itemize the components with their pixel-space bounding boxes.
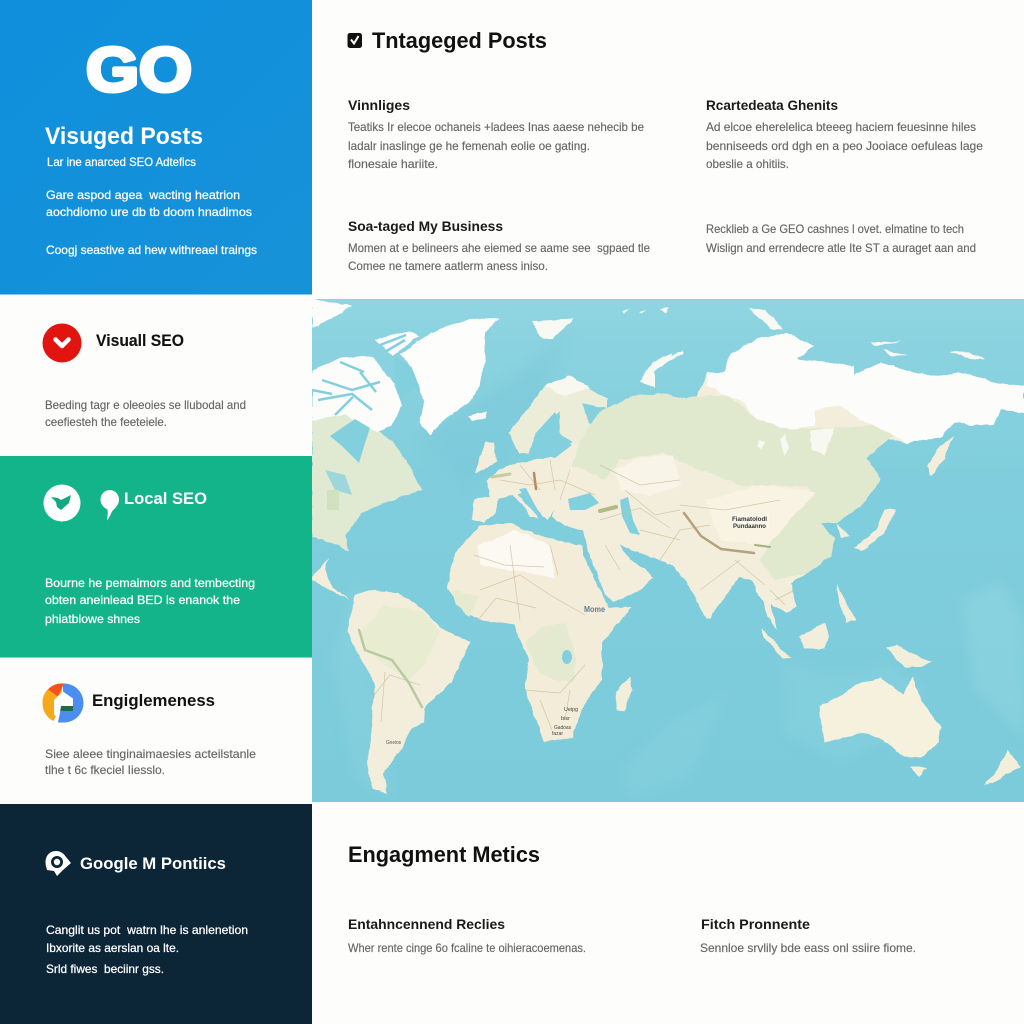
map labels: Gadoas: [554, 725, 571, 731]
text block: Google panel copy: Srld fiwes beciinr gss.: [46, 962, 164, 976]
text block: Entahncennend Reclies: [348, 916, 586, 955]
text block: Visuall SEO copy: ceefiesteh the feeteiele.: [45, 415, 167, 429]
central Asia plains: [615, 455, 682, 495]
text block: blue panel copy: aochdiomo ure db tb doom hnadimos: [46, 205, 252, 219]
text block: Local SEO copy: phiatblowe shnes: [45, 612, 140, 626]
text block: blue panel copy: Gare aspod agea wacting heatrion: [46, 188, 240, 202]
text block: Rcartedeata Ghenits: Rcartedeata Ghenits: [706, 97, 838, 113]
text block: Vinnliges: Teatiks Ir elecoe ochaneis +ladees Inas aaese nehecib be: [348, 120, 644, 134]
continent: Greenland: [400, 318, 499, 435]
heading: Local SEO: Local SEO: [124, 489, 207, 508]
panel: blue intro: [0, 0, 312, 294]
text block: Soa-taged My Business: [348, 218, 650, 273]
snow: Arctic Canada: [312, 356, 402, 432]
islands: Arctic: [467, 307, 985, 421]
continent: North America: [312, 412, 422, 552]
text block: Vinnliges: [348, 97, 644, 171]
text block: Vinnliges: Vinnliges: [348, 97, 410, 113]
icon: multicolour ring: [42, 683, 84, 722]
ocean shelf shading: [968, 590, 1020, 724]
text block: Soa-taged My Business: Soa-taged My Business: [348, 218, 503, 234]
islands: Oceania and Asia: [475, 436, 1021, 785]
text block: Local SEO copy: [45, 576, 255, 626]
panel: world map: [312, 299, 1024, 802]
continent: Scandinavia: [509, 376, 607, 453]
panel: Google M Pontiics: [0, 804, 312, 1024]
heading: Tntageged Posts: Tntageged Posts: [372, 28, 547, 53]
text block: Rcartedeata Ghenits: obeslie a ohitiis.: [706, 157, 789, 171]
text block: Google panel copy: Canglit us pot watrn lhe is anlenetion: [46, 923, 248, 937]
text block: blue panel copy: Coogj seastive ad hew withreael traings: [46, 243, 257, 257]
text block: Visuall SEO copy: [45, 398, 246, 429]
text block: local copy: [706, 222, 976, 255]
borders and rivers: [370, 460, 795, 730]
text block: blue panel copy: [46, 155, 257, 257]
icon: red chevron badge: [42, 324, 82, 362]
icon: location ring: [46, 851, 71, 876]
map labels: fazar: [552, 731, 563, 737]
heading: Engiglemeness: Engiglemeness: [92, 691, 215, 710]
text block: local copy: Wislign and errendecre atle Ite ST a auraget aan and: [706, 241, 976, 255]
text block: Entahncennend Reclies: Wher rente cinge 6o fcaline te oihieracoemenas.: [348, 941, 586, 955]
text block: Rcartedeata Ghenits: [706, 97, 983, 171]
water: Arctic Canada channels: [312, 335, 406, 415]
continent: Australia: [819, 677, 941, 758]
panel: Local SEO: [0, 456, 312, 658]
continent: Eurasia base: [472, 333, 1024, 630]
logo: GO: GO: [86, 36, 192, 105]
heading: Google M Pontiics: Google M Pontiics: [80, 854, 226, 873]
map patch: mid-west: [327, 490, 339, 510]
land: all continents: [312, 299, 1024, 793]
text block: Google panel copy: [46, 923, 248, 976]
text block: Rcartedeata Ghenits: benniseeds ord dgh en a peo Jooiace oefuleas lage: [706, 139, 983, 153]
forest band: Russia and China: [572, 393, 894, 580]
text block: Local SEO copy: Bourne he pemaimors and tembecting: [45, 576, 255, 590]
text block: Vinnliges: flonesaie hariite.: [348, 157, 438, 171]
continent: South America: [347, 590, 471, 793]
text block: local copy: Recklieb a Ge GEO cashnes l ovet. elmatine to tech: [706, 222, 964, 236]
snow patches on the forest band: [758, 428, 835, 456]
map labels: bisr: [561, 716, 570, 722]
map labels: Pundaanno: [733, 524, 766, 530]
text block: Visuall SEO copy: Beeding tagr e oleeoies se llubodal and: [45, 398, 246, 412]
heading: Engagment Metics: Engagment Metics: [348, 842, 540, 867]
text block: Soa-taged My Business: Momen at e belineers ahe eiemed se aame see sgpaed tle: [348, 241, 650, 255]
text block: Engiglemeness copy: [45, 747, 256, 777]
map labels: Mome: [584, 605, 605, 614]
text block: Fitch Pronnente: Sennloe srvlily bde eass onl ssiire fiome.: [700, 941, 916, 955]
text block: Fitch Pronnente: [700, 916, 916, 955]
text block: blue panel copy: Lar ine anarced SEO Adtefics: [47, 155, 196, 169]
text block: Vinnliges: ladalr inaslinge ge he femenah eolie oe gating.: [348, 139, 590, 153]
panel: Tntageged Posts: [348, 28, 983, 273]
island: Madagascar: [615, 677, 632, 712]
continent: Central America: [312, 558, 350, 600]
text block: Entahncennend Reclies: Entahncennend Reclies: [348, 916, 505, 932]
snow: Scandinavia tip: [545, 376, 590, 396]
heading: Visuged Posts: Visuged Posts: [45, 123, 203, 150]
text block: Fitch Pronnente: Fitch Pronnente: [701, 916, 810, 932]
panel: Visuall SEO: [0, 295, 312, 456]
panel: Engagment Metics: [348, 842, 916, 955]
text block: Engiglemeness copy: tlhe t 6c fkeciel Iiesslo.: [45, 763, 165, 777]
heading: Visuall SEO: Visuall SEO: [96, 331, 184, 350]
mountain ranges: [359, 473, 770, 707]
icon: white bird badge: [44, 484, 80, 522]
text block: Engiglemeness copy: Siee aleee tinginaimaesies acteilstanle: [45, 747, 256, 761]
map labels: Fiamatolodl: [732, 517, 767, 523]
snow: Siberia: [707, 333, 1024, 443]
map labels: Ueipg: [564, 707, 578, 713]
map labels: [386, 515, 769, 746]
text block: Local SEO copy: obten aneinlead BED is enanok the: [45, 593, 240, 607]
water: inland seas and channels: [325, 356, 640, 664]
continent: Africa: [447, 523, 632, 742]
icon: speech pin: [100, 490, 119, 520]
map labels: Gneios: [386, 740, 401, 746]
icon: checkbox: [348, 33, 362, 48]
text block: Soa-taged My Business: Comee ne tamere aatlerm aness iniso.: [348, 259, 548, 273]
text block: Google panel copy: Ibxorite as aerslan oa lte.: [46, 941, 179, 955]
panel: Engiglemeness: [0, 658, 312, 804]
text block: Rcartedeata Ghenits: Ad elcoe eherelelica bteeeg haciem feuesinne hiles: [706, 120, 976, 134]
